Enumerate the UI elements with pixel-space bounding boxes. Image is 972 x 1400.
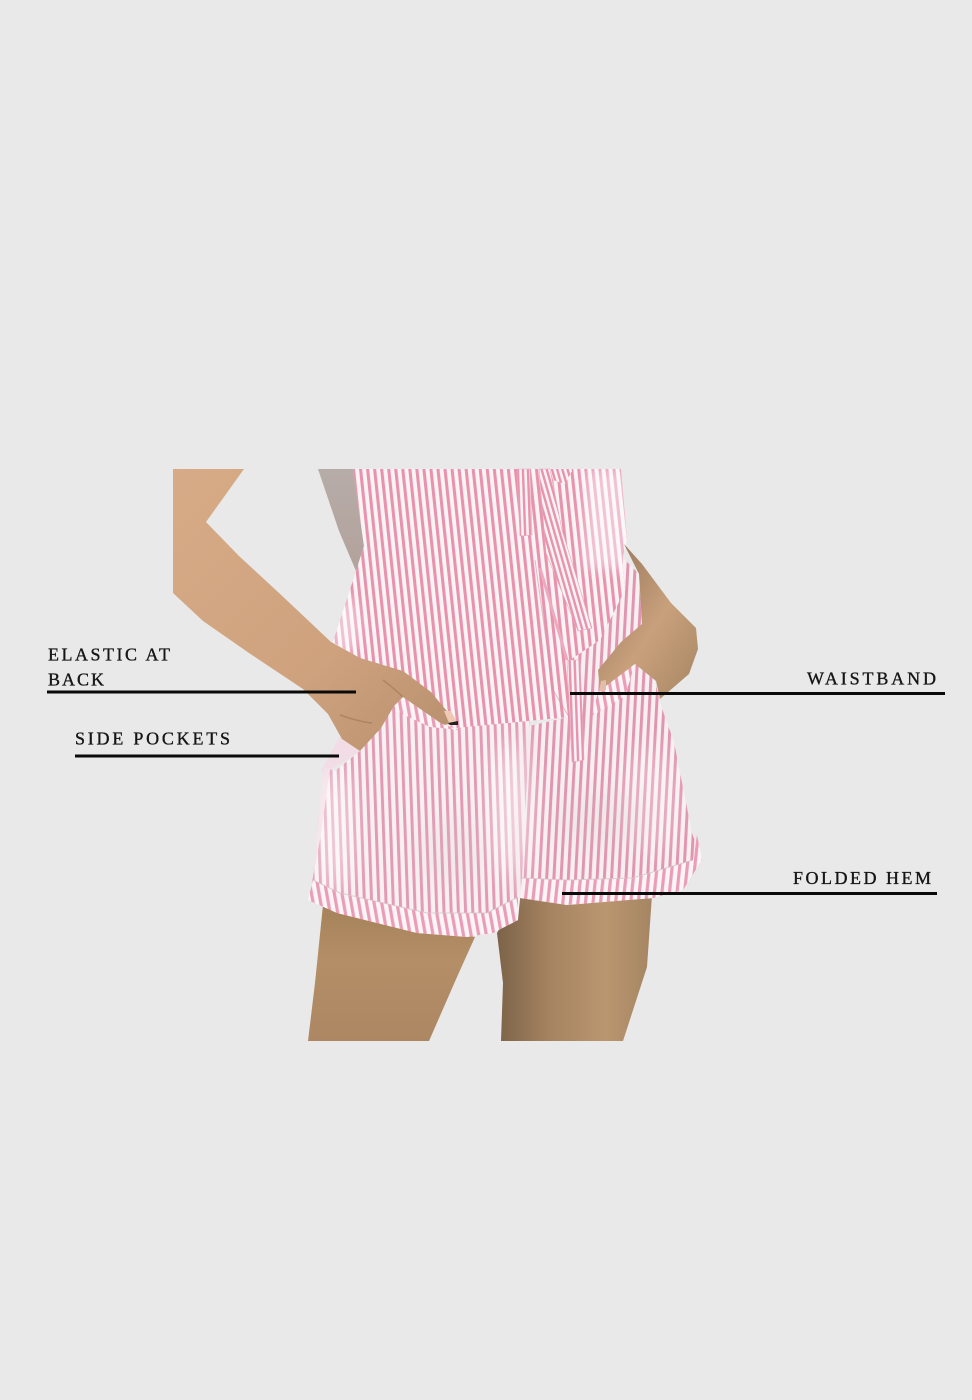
label: WAISTBAND	[807, 668, 936, 688]
long tie	[539, 469, 592, 631]
right arm and hand	[598, 544, 698, 699]
photo: model wearing striped top and shorts	[173, 469, 702, 1041]
left leg	[308, 905, 475, 1041]
right shorts panel	[520, 556, 702, 905]
callout: side pockets	[75, 728, 339, 758]
callout: folded hem	[562, 868, 937, 895]
left pocket band	[394, 697, 460, 730]
label: FOLDED HEM	[793, 868, 931, 888]
hanging tie end	[567, 660, 584, 762]
right leg	[497, 895, 652, 1041]
back of top	[318, 469, 364, 571]
leader line	[570, 692, 945, 695]
right folded hem band	[520, 835, 702, 905]
pale side of pocket	[313, 727, 360, 877]
shorts	[308, 556, 702, 937]
callout: elastic at back	[47, 644, 356, 694]
short tie	[517, 469, 532, 536]
left arm and hand	[173, 469, 459, 751]
left hand knuckle shading	[340, 680, 403, 723]
infographic: annotated shorts	[47, 468, 945, 1041]
thin string	[540, 568, 567, 660]
right pocket band	[592, 664, 635, 716]
hem fold lines	[313, 860, 693, 913]
leader line	[562, 892, 937, 895]
tie strings	[517, 469, 592, 762]
top light and shadow	[331, 469, 627, 655]
callout: waistband	[570, 668, 945, 695]
left thumb nail	[444, 711, 458, 724]
placket seam	[535, 560, 569, 717]
label line two: BACK	[48, 670, 104, 690]
left shorts panel	[308, 700, 530, 937]
left folded hem band	[308, 880, 518, 937]
fabric light and shadow	[317, 740, 678, 895]
nail tip	[448, 721, 458, 725]
top tie knot tail	[550, 469, 573, 484]
striped top	[333, 469, 627, 728]
leader line	[75, 754, 339, 758]
leader line	[47, 690, 356, 694]
label: SIDE POCKETS	[75, 728, 230, 748]
right hand nail	[599, 680, 606, 692]
inner leg crease	[516, 725, 530, 897]
label: ELASTIC AT	[48, 644, 170, 664]
